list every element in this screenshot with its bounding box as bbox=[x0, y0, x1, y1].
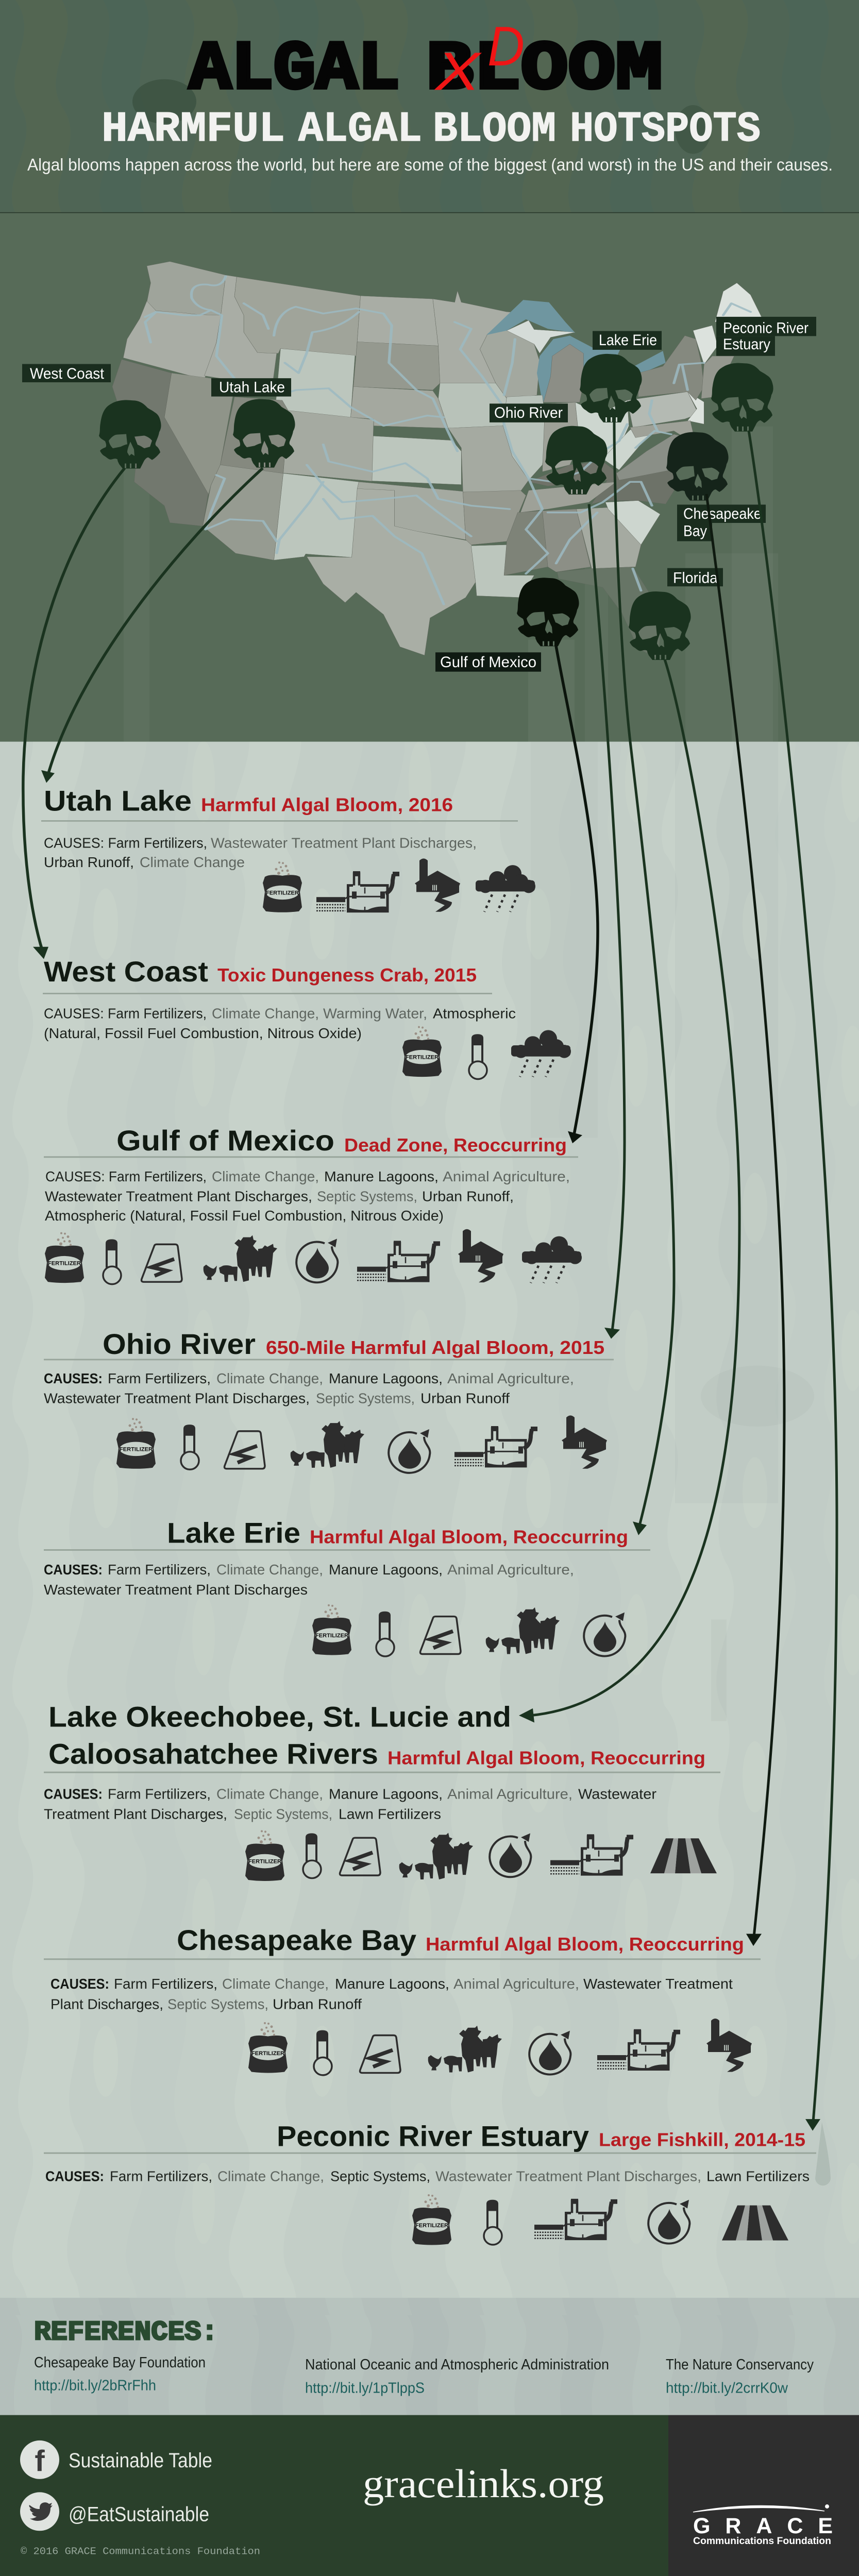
causes text: CAUSES: bbox=[44, 1786, 103, 1802]
heading: West Coast: West Coast bbox=[44, 956, 208, 988]
heading: Chesapeake Bay bbox=[44, 1924, 761, 1959]
heading: Utah Lake bbox=[41, 785, 518, 821]
panel: Ohio River bbox=[44, 1328, 614, 1473]
icon: skull Florida bbox=[629, 591, 691, 660]
icon: skull Gulf of Mexico bbox=[517, 578, 579, 646]
causes text: CAUSES: bbox=[50, 1976, 109, 1992]
text: @EatSustainable: @EatSustainable bbox=[69, 2503, 209, 2526]
causes text: Lawn Fertilizers bbox=[706, 2168, 810, 2184]
icon: skull Utah Lake bbox=[233, 399, 295, 468]
causes text: Manure Lagoons, bbox=[324, 1168, 439, 1184]
panel: Utah Lake bbox=[41, 785, 535, 912]
causes text: CAUSES: Farm Fertilizers, bbox=[45, 1168, 207, 1184]
causes text: Climate Change, bbox=[212, 1006, 319, 1022]
heading: Ohio River: Ohio River bbox=[103, 1328, 256, 1360]
causes text: Septic Systems, bbox=[317, 1189, 417, 1204]
icon: skull Lake Erie bbox=[580, 354, 642, 422]
icon: facebook bbox=[20, 2441, 59, 2479]
heading: West Coast bbox=[43, 956, 492, 993]
icons row: FERTILIZER bbox=[120, 1446, 153, 1452]
icons row: FERTILIZER bbox=[251, 2050, 284, 2057]
reference: NOAA bbox=[305, 2357, 609, 2396]
icons row bbox=[402, 1026, 571, 1079]
panel: references bbox=[0, 2298, 859, 2415]
arrow: Chesapeake Bay bbox=[706, 494, 784, 1946]
title: Algal Bloom: ALGAL bbox=[189, 31, 400, 109]
panel: Lake Erie bbox=[44, 1517, 650, 1656]
heading: Utah Lake: Utah Lake bbox=[44, 785, 192, 817]
panel: header background bbox=[0, 0, 859, 213]
heading: Harmful Algal Bloom Hotspots bbox=[102, 106, 761, 154]
causes text: Wastewater Treatment Plant Discharges, bbox=[44, 1391, 310, 1406]
panel: Chesapeake Bay bbox=[44, 1924, 761, 2075]
causes text: Animal Agriculture, bbox=[447, 1786, 572, 1802]
causes text bbox=[44, 1006, 516, 1041]
causes text: Manure Lagoons, bbox=[329, 1370, 443, 1386]
heading: Harmful Algal Bloom Hotspots: BLOOM bbox=[433, 106, 556, 154]
causes text: Wastewater bbox=[578, 1786, 656, 1802]
arrow: Florida bbox=[519, 659, 739, 1723]
causes text: Farm Fertilizers, bbox=[108, 1370, 211, 1386]
causes text: Climate Change, bbox=[212, 1168, 319, 1184]
label: Peconic River Estuary: Estuary bbox=[723, 336, 770, 353]
causes text bbox=[44, 1370, 574, 1406]
causes text: Manure Lagoons, bbox=[329, 1562, 443, 1578]
heading: Harmful Algal Bloom Hotspots: HARMFUL bbox=[102, 106, 285, 154]
label: Gulf of Mexico: Gulf of Mexico bbox=[440, 654, 536, 671]
icons row: FERTILIZER bbox=[406, 1055, 439, 1061]
causes text: Farm Fertilizers, bbox=[108, 1786, 211, 1802]
icons row: FERTILIZER bbox=[266, 890, 299, 896]
reference: NOAA: http://bit.ly/1pTlppS bbox=[305, 2380, 425, 2396]
causes text: Urban Runoff, bbox=[422, 1189, 514, 1204]
label: Peconic River Estuary: Peconic River bbox=[723, 320, 809, 336]
icon: twitter bbox=[20, 2492, 59, 2531]
heading: Lake Erie: Lake Erie bbox=[167, 1517, 300, 1549]
causes text: Atmospheric (Natural, Fossil Fuel Combustion, Nitrous Oxide) bbox=[45, 1208, 444, 1224]
heading: Lake Okeechobee, St. Lucie and Caloosahatchee Rivers: Lake Okeechobee, St. Lucie and bbox=[48, 1701, 511, 1733]
title: Algal Bloom: X bbox=[434, 42, 482, 101]
causes text: Climate Change bbox=[140, 854, 245, 870]
panel: Lake Okeechobee bbox=[44, 1701, 720, 1881]
heading: Utah Lake: Harmful Algal Bloom, 2016 bbox=[201, 794, 453, 816]
arrow: West Coast bbox=[23, 468, 125, 959]
heading: Gulf of Mexico: Dead Zone, Reoccurring bbox=[344, 1134, 567, 1156]
logo: GRACE Communications Foundation: GRACE bbox=[693, 2514, 833, 2538]
causes text: Manure Lagoons, bbox=[335, 1976, 449, 1992]
causes text: Treatment Plant Discharges, bbox=[44, 1806, 227, 1822]
panel: light content background bbox=[0, 742, 859, 2298]
label: Chesapeake Bay: Chesapeake bbox=[683, 505, 762, 522]
text: gracelinks.org: gracelinks.org bbox=[363, 2462, 604, 2506]
causes text: CAUSES: bbox=[44, 1562, 103, 1578]
heading: Chesapeake Bay: Harmful Algal Bloom, Reoccurring bbox=[426, 1934, 744, 1955]
heading: Peconic River Estuary bbox=[44, 2121, 816, 2153]
icon: skull Ohio River bbox=[545, 426, 608, 495]
heading: Peconic River Estuary: Large Fishkill, 2014-15 bbox=[599, 2129, 805, 2150]
icons row: FERTILIZER bbox=[315, 1633, 348, 1639]
causes text: Wastewater Treatment Plant Discharges, bbox=[211, 835, 477, 851]
panel: Peconic River Estuary bbox=[44, 2121, 816, 2245]
arrow: Lake Erie bbox=[614, 420, 674, 1535]
causes text: Urban Runoff, bbox=[44, 854, 134, 870]
heading: Lake Erie bbox=[44, 1517, 650, 1550]
causes text bbox=[50, 1976, 733, 2012]
causes text: Animal Agriculture, bbox=[447, 1562, 574, 1578]
label: Ohio River: Ohio River bbox=[494, 404, 563, 421]
heading: Harmful Algal Bloom Hotspots: ALGAL bbox=[298, 106, 422, 154]
panel: Gulf of Mexico bbox=[44, 1125, 582, 1284]
icons row bbox=[116, 1415, 607, 1473]
causes text: Farm Fertilizers, bbox=[110, 2168, 212, 2184]
panel: map background bbox=[0, 213, 859, 742]
icons row bbox=[263, 858, 535, 912]
heading: Lake Okeechobee, St. Lucie and Caloosahatchee Rivers bbox=[44, 1701, 720, 1772]
causes text: Septic Systems, bbox=[234, 1806, 332, 1822]
causes text: Wastewater Treatment Plant Discharges bbox=[44, 1582, 308, 1598]
icons row bbox=[412, 2194, 788, 2245]
causes text bbox=[44, 835, 477, 870]
arrow: Ohio River bbox=[589, 504, 625, 1339]
heading: Harmful Algal Bloom Hotspots: HOTSPOTS bbox=[570, 106, 761, 154]
heading: West Coast: Toxic Dungeness Crab, 2015 bbox=[217, 964, 477, 986]
panel: West Coast bbox=[43, 956, 571, 1079]
icons row bbox=[312, 1604, 625, 1656]
causes text: Plant Discharges, bbox=[50, 1996, 163, 2012]
causes text: Lawn Fertilizers bbox=[339, 1806, 441, 1822]
arrow: Peconic River Estuary bbox=[749, 431, 837, 2131]
causes text: Urban Runoff bbox=[420, 1391, 510, 1406]
causes text: CAUSES: bbox=[45, 2168, 104, 2184]
heading: Gulf of Mexico: Gulf of Mexico bbox=[116, 1125, 334, 1157]
heading: Ohio River: 650-Mile Harmful Algal Bloom, 2015 bbox=[266, 1337, 604, 1358]
reference: The Nature Conservancy: http://bit.ly/2crrK0w bbox=[666, 2380, 788, 2396]
causes text: Septic Systems, bbox=[330, 2168, 430, 2184]
panel: footer bbox=[0, 2415, 859, 2576]
icons row bbox=[45, 1229, 582, 1284]
title: Algal Bloom bbox=[189, 15, 663, 109]
causes text: CAUSES: Farm Fertilizers, bbox=[44, 835, 207, 851]
reference: The Nature Conservancy bbox=[666, 2357, 814, 2396]
causes text: CAUSES: Farm Fertilizers, bbox=[44, 1006, 207, 1022]
causes text: Wastewater Treatment Plant Discharges, bbox=[45, 1189, 312, 1204]
heading: Peconic River Estuary: Peconic River Estuary bbox=[277, 2121, 589, 2152]
logo: GRACE Communications Foundation bbox=[693, 2504, 833, 2547]
causes text: Warming Water, bbox=[323, 1006, 427, 1022]
title: Algal Bloom: BLOOM bbox=[426, 31, 663, 109]
label: Florida: Florida bbox=[673, 569, 718, 586]
label: Utah Lake: Utah Lake bbox=[219, 379, 285, 396]
reference: Chesapeake Bay Foundation bbox=[34, 2354, 206, 2394]
label: West Coast: West Coast bbox=[30, 365, 105, 382]
icon: skull Chesapeake Bay bbox=[666, 432, 729, 501]
heading: Lake Okeechobee, St. Lucie and Caloosahatchee Rivers: Caloosahatchee Rivers bbox=[48, 1738, 378, 1770]
label: Lake Erie: Lake Erie bbox=[599, 332, 657, 349]
label: Chesapeake Bay: Bay bbox=[683, 523, 707, 540]
causes text: Wastewater Treatment Plant Discharges, bbox=[435, 2168, 701, 2184]
arrow: Gulf of Mexico bbox=[556, 646, 598, 1143]
heading: Lake Erie: Harmful Algal Bloom, Reoccurring bbox=[310, 1527, 628, 1548]
icon: skull Peconic River Estuary bbox=[711, 363, 773, 432]
label: Chesapeake Bay bbox=[677, 505, 766, 541]
icons row bbox=[248, 2019, 752, 2075]
heading: Gulf of Mexico bbox=[44, 1125, 578, 1157]
causes text bbox=[44, 1786, 656, 1822]
causes text: Atmospheric bbox=[433, 1006, 516, 1022]
causes text: Farm Fertilizers, bbox=[114, 1976, 217, 1992]
reference: Chesapeake Bay Foundation: http://bit.ly/2bRrFhh bbox=[34, 2378, 156, 2394]
causes text: Animal Agriculture, bbox=[447, 1370, 574, 1386]
heading: Lake Okeechobee, St. Lucie and Caloosahatchee Rivers: Harmful Algal Bloom, Reoccurring bbox=[388, 1748, 705, 1768]
causes text: Climate Change, bbox=[216, 1370, 323, 1386]
logo: GRACE Communications Foundation: Communications Foundation bbox=[693, 2535, 831, 2547]
causes text: Animal Agriculture, bbox=[453, 1976, 579, 1992]
reference: The Nature Conservancy: The Nature Conservancy bbox=[666, 2357, 814, 2373]
causes text: Climate Change, bbox=[216, 1562, 323, 1578]
heading: Chesapeake Bay: Chesapeake Bay bbox=[177, 1924, 416, 1956]
icon: facebook: f bbox=[35, 2445, 45, 2478]
icons row: FERTILIZER bbox=[48, 1261, 81, 1267]
causes text: (Natural, Fossil Fuel Combustion, Nitrous Oxide) bbox=[44, 1025, 362, 1041]
causes text: Septic Systems, bbox=[316, 1391, 415, 1406]
arrow: Utah Lake bbox=[41, 468, 263, 783]
causes text: Animal Agriculture, bbox=[443, 1168, 570, 1184]
icons row: FERTILIZER bbox=[248, 1859, 281, 1865]
icon: skull West Coast bbox=[99, 400, 161, 469]
causes text: Urban Runoff bbox=[273, 1996, 362, 2012]
causes text bbox=[45, 2168, 810, 2184]
causes text: Septic Systems, bbox=[167, 1996, 268, 2012]
skulls and labels on the map bbox=[22, 317, 816, 672]
text: copyright: © 2016 GRACE Communications Foundation bbox=[21, 2546, 260, 2557]
causes text: Climate Change, bbox=[222, 1976, 329, 1992]
heading: references: REFERENCES: bbox=[34, 2317, 218, 2348]
reference: NOAA: National Oceanic and Atmospheric Administration bbox=[305, 2357, 609, 2373]
causes text: Climate Change, bbox=[217, 2168, 324, 2184]
map: United States bbox=[112, 262, 762, 659]
heading: Ohio River bbox=[44, 1328, 614, 1360]
causes text: Climate Change, bbox=[216, 1786, 323, 1802]
icons row bbox=[245, 1830, 717, 1881]
causes text: Manure Lagoons, bbox=[329, 1786, 443, 1802]
causes text: Farm Fertilizers, bbox=[108, 1562, 211, 1578]
causes text: Wastewater Treatment bbox=[583, 1976, 733, 1992]
causes text: CAUSES: bbox=[44, 1370, 103, 1386]
causes text bbox=[44, 1562, 574, 1598]
text: Sustainable Table: Sustainable Table bbox=[69, 2449, 212, 2472]
label: Peconic River Estuary bbox=[716, 317, 816, 356]
title: Algal Bloom: D bbox=[487, 15, 525, 78]
icons row: FERTILIZER bbox=[415, 2223, 448, 2229]
causes text bbox=[45, 1168, 570, 1224]
reference: Chesapeake Bay Foundation: Chesapeake Bay Foundation bbox=[34, 2354, 206, 2371]
